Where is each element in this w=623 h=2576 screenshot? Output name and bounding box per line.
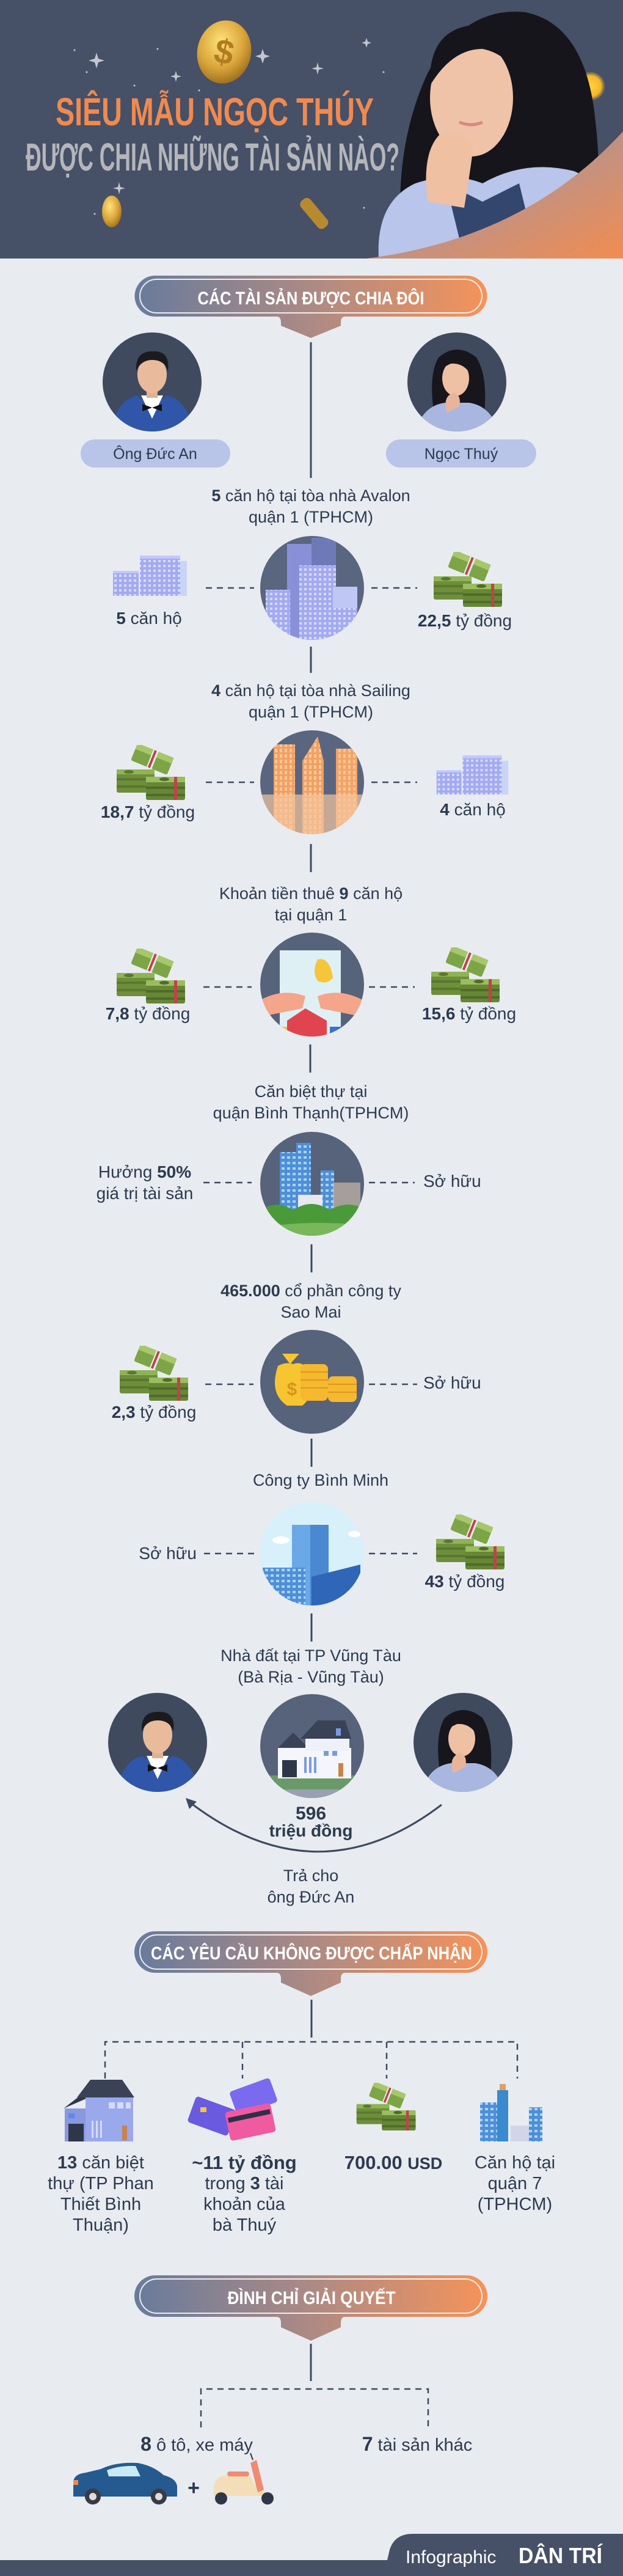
item 5: Sao Mai shares: Sao Mai xyxy=(280,1303,341,1321)
list: rejected claims: bà Thuý xyxy=(213,2215,277,2235)
icon: gold coins xyxy=(102,15,605,231)
item: 8 cars and motorbikes: 8 ô tô, xe máy xyxy=(140,2433,253,2455)
item 5: Sao Mai shares: 2,3 tỷ đồng xyxy=(112,1403,196,1422)
avatar: Ngoc Thuy xyxy=(407,332,506,431)
header banner xyxy=(0,0,623,259)
section heading: ĐÌNH CHỈ GIẢI QUYẾT: ĐÌNH CHỈ GIẢI QUYẾT xyxy=(227,2288,396,2308)
item: 8 cars and motorbikes: + xyxy=(188,2476,200,2500)
list: rejected claims: Thiết Bình xyxy=(60,2195,141,2214)
caption: tra cho ong Duc An: Trả cho xyxy=(283,1866,338,1885)
icon: bank cards xyxy=(187,2077,278,2141)
item 6: Binh Minh company: Công ty Bình Minh xyxy=(253,1471,388,1489)
item: 8 cars and motorbikes xyxy=(73,2433,274,2504)
list: rejected claims: khoản của xyxy=(203,2195,286,2214)
item 5: Sao Mai shares xyxy=(112,1282,481,1436)
section heading: CÁC TÀI SẢN ĐƯỢC CHIA ĐÔI xyxy=(134,276,487,338)
item 2: Sailing: quận 1 (TPHCM) xyxy=(249,703,373,721)
item 2: Sailing: 18,7 tỷ đồng xyxy=(101,802,195,821)
item 3: rent of 9 apartments: Khoản tiền thuê 9 căn hộ xyxy=(219,884,403,903)
list: rejected claims: 13 căn biệt xyxy=(57,2153,144,2173)
item 5: Sao Mai shares: 465.000 cổ phần công ty xyxy=(220,1282,401,1300)
list: rejected claims: Thuận) xyxy=(73,2215,129,2235)
item 3: rent of 9 apartments xyxy=(106,884,516,1039)
icon: villa xyxy=(64,2080,134,2141)
avatar: Ong Duc An xyxy=(103,332,202,431)
item 2: Sailing xyxy=(101,681,508,837)
item 1: Avalon: 5 căn hộ tại tòa nhà Avalon xyxy=(211,486,410,505)
list: rejected claims: (TPHCM) xyxy=(478,2195,552,2214)
icon: towers district 7 xyxy=(480,2084,542,2141)
list: rejected claims xyxy=(48,2152,555,2235)
section heading: CÁC TÀI SẢN ĐƯỢC CHIA ĐÔI: CÁC TÀI SẢN ĐƯỢC CHIA ĐÔI xyxy=(198,288,424,309)
item 7: Vung Tau land: 596 xyxy=(296,1804,326,1824)
icon: scooter xyxy=(214,2453,274,2504)
title xyxy=(26,89,399,179)
item: 7 other assets: 7 tài sản khác xyxy=(362,2433,472,2455)
item 7: Vung Tau land: Nhà đất tại TP Vũng Tàu xyxy=(220,1646,401,1665)
item 6: Binh Minh company xyxy=(139,1471,505,1610)
section heading: ĐÌNH CHỈ GIẢI QUYẾT xyxy=(134,2275,487,2341)
item 4: villa Binh Thanh: Hưởng 50% xyxy=(98,1162,191,1181)
item 7: Vung Tau land: triệu đồng xyxy=(269,1821,352,1840)
name tag: Ngoc Thuy: Ngọc Thuý xyxy=(424,446,498,463)
item 2: Sailing: 4 căn hộ xyxy=(440,800,506,819)
item 4: villa Binh Thanh: Sở hữu xyxy=(423,1172,481,1191)
list: rejected claims: thự (TP Phan xyxy=(48,2174,154,2193)
vertical connector: top xyxy=(310,342,312,478)
footer: Infographic Dan Tri xyxy=(0,2534,623,2576)
list: rejected claims: ~11 tỷ đồng xyxy=(192,2152,297,2173)
item 4: villa Binh Thanh xyxy=(97,1082,481,1241)
section heading: CÁC YÊU CẦU KHÔNG ĐƯỢC CHẤP NHẬN xyxy=(134,1931,487,1996)
caption: tra cho ong Duc An xyxy=(268,1866,354,1906)
photo: Ngoc Thuy xyxy=(366,12,623,259)
icon: money (700.00 USD) xyxy=(357,2082,416,2130)
item 3: rent of 9 apartments: tại quận 1 xyxy=(275,906,347,924)
name tag: Ong Duc An xyxy=(81,439,230,468)
arrow: payment to Ong Duc An xyxy=(186,1798,442,1852)
list: rejected claims: 700.00 USD xyxy=(344,2152,442,2173)
item 6: Binh Minh company: 43 tỷ đồng xyxy=(425,1572,505,1591)
item 3: rent of 9 apartments: 15,6 tỷ đồng xyxy=(422,1004,516,1023)
item 4: villa Binh Thanh: quận Bình Thạnh(TPHCM) xyxy=(213,1104,409,1122)
item 6: Binh Minh company: Sở hữu xyxy=(139,1544,197,1563)
icon: gold coins: $ xyxy=(211,31,238,73)
item 1: Avalon: 22,5 tỷ đồng xyxy=(418,611,512,630)
item 2: Sailing: 4 căn hộ tại tòa nhà Sailing xyxy=(211,681,410,700)
footer: Infographic Dan Tri: Infographic xyxy=(406,2547,496,2567)
item 1: Avalon: quận 1 (TPHCM) xyxy=(249,508,373,526)
item 7: Vung Tau land: (Bà Rịa - Vũng Tàu) xyxy=(238,1668,384,1686)
list: rejected claims: trong 3 tài xyxy=(205,2174,283,2193)
section heading: CÁC YÊU CẦU KHÔNG ĐƯỢC CHẤP NHẬN: CÁC YÊU CẦU KHÔNG ĐƯỢC CHẤP NHẬN xyxy=(151,1943,472,1964)
item 4: villa Binh Thanh: giá trị tài sản xyxy=(97,1184,193,1203)
item 1: Avalon: 5 căn hộ xyxy=(116,609,182,628)
item 3: rent of 9 apartments: 7,8 tỷ đồng xyxy=(106,1004,190,1023)
list: rejected claims: quận 7 xyxy=(488,2174,542,2193)
name tag: Ong Duc An: Ông Đức An xyxy=(113,445,197,463)
item 1: Avalon xyxy=(113,486,512,645)
footer: Infographic Dan Tri: DÂN TRÍ xyxy=(519,2542,603,2568)
item 5: Sao Mai shares: $ xyxy=(287,1379,297,1400)
item 4: villa Binh Thanh: Căn biệt thự tại xyxy=(255,1082,367,1101)
item 5: Sao Mai shares: Sở hữu xyxy=(423,1373,481,1392)
name tag: Ngoc Thuy xyxy=(386,439,536,468)
caption: tra cho ong Duc An: ông Đức An xyxy=(268,1888,354,1906)
item 7: Vung Tau land xyxy=(103,1646,518,1840)
list: rejected claims: Căn hộ tại xyxy=(475,2153,555,2173)
icon: car xyxy=(73,2463,177,2504)
title: SIÊU MẪU NGỌC THÚY xyxy=(56,89,374,134)
